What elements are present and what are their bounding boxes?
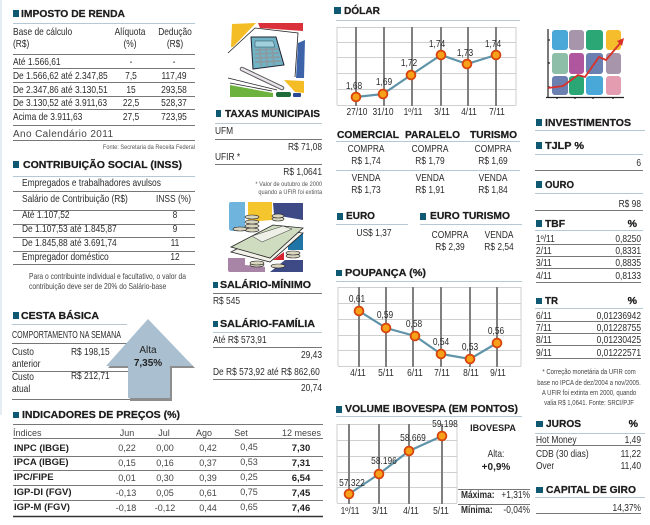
panel: câmbio comercial, paralelo, turismo: TURISMO [470, 129, 517, 141]
panel: salário-mínimo [213, 278, 322, 306]
panel: contribuição social: De 1.845,88 até 3.691,74 [22, 237, 117, 248]
panel: tr: % [628, 295, 638, 307]
panel: tr: 9/11 [536, 347, 552, 358]
panel: imposto de renda: 723,95 [161, 111, 187, 122]
line chart: ibovespa: 58.196 [371, 455, 397, 466]
panel: euro turismo: COMPRA [432, 229, 469, 240]
line chart: dólar: 1,68 [346, 80, 362, 91]
panel: câmbio comercial, paralelo, turismo: COMPRA [348, 143, 385, 154]
panel: imposto de renda: De 2.347,86 até 3.130,51 [13, 84, 108, 95]
panel: imposto de renda: 528,37 [161, 97, 187, 108]
panel: cesta básica: R$ 212,71 [71, 370, 110, 381]
panel: tbf [535, 218, 643, 282]
panel: câmbio comercial, paralelo, turismo: R$ 1,74 [351, 155, 381, 166]
panel: euro [336, 210, 408, 238]
panel: indicadores de preços: IGP-DI (FGV) [14, 487, 72, 498]
callout: ibovespa: -0,04% [503, 504, 530, 515]
heading: cesta básica: CESTA BÁSICA [21, 309, 99, 322]
panel: taxas municipais: R$ 71,08 [288, 141, 322, 152]
line chart: ibovespa: 5/11 [433, 505, 449, 516]
line chart: poupança: 7/11 [434, 367, 450, 378]
panel: contribuição social: Salário de Contribuição (R$) [22, 193, 128, 204]
panel: câmbio comercial, paralelo, turismo: COMPRA [412, 143, 449, 154]
heading: juros: JUROS [546, 418, 581, 430]
panel: contribuição social: Até 1.107,52 [22, 209, 70, 220]
callout: ibovespa: Mínima: [461, 504, 493, 515]
panel: câmbio comercial, paralelo, turismo [336, 129, 520, 195]
line chart: poupança: 4/11 [350, 367, 366, 378]
panel: contribuição social: contribuição deve ser de 20% do Salário-base [29, 281, 166, 291]
line chart: dólar: 1,72 [401, 57, 417, 68]
panel: salário-família: De R$ 573,92 até R$ 862,60 [213, 366, 320, 377]
panel: contribuição social: Empregador doméstico [22, 251, 109, 262]
line chart: poupança: 6/11 [407, 367, 423, 378]
icon: money illustration [228, 202, 303, 272]
panel: indicadores de preços: Jun [120, 428, 134, 438]
panel: volume ibovespa [336, 403, 530, 516]
panel: salário-família: Até R$ 573,91 [213, 334, 267, 345]
panel: imposto de renda: 117,49 [161, 70, 187, 81]
heading: poupança: POUPANÇA (%) [345, 267, 426, 279]
panel: indicadores de preços: 0,45 [240, 442, 258, 452]
panel: contribuição social: 12 [170, 251, 180, 262]
panel: capital de giro: 14,37% [613, 502, 641, 513]
panel: imposto de renda: Fonte: Secretaria da Receita Federal [103, 144, 195, 151]
panel: indicadores de preços: 0,75 [240, 487, 258, 497]
panel: tbf: 0,8835 [615, 257, 641, 268]
panel: indicadores de preços: 0,53 [240, 457, 258, 467]
panel: indicadores de preços: 0,42 [199, 443, 217, 453]
note: ufir: * Correção monetária da UFIR com [542, 369, 636, 376]
panel: indicadores de preços: -0,12 [155, 503, 175, 513]
heading: salário-família: SALÁRIO-FAMÍLIA [220, 317, 315, 330]
panel: indicadores de preços: 0,25 [240, 472, 258, 482]
panel: tbf: 1º/11 [536, 233, 555, 244]
panel: tbf: 3/11 [536, 257, 552, 268]
panel: indicadores de preços [13, 409, 323, 516]
panel: indicadores de preços: 0,05 [156, 488, 174, 498]
panel: juros: Hot Money [536, 434, 577, 445]
panel: tbf: % [628, 218, 638, 230]
panel: juros: CDB (30 dias) [536, 448, 589, 459]
note: ufir: base no IPCA de dez/2004 a nov/2005. [537, 380, 641, 387]
panel: tr: 0,01230425 [597, 334, 641, 345]
panel: taxas municipais: * Valor de outubro de 2000 [255, 181, 323, 188]
line chart: dólar: 1,73 [457, 47, 473, 58]
panel: tbf: 0,8331 [615, 245, 641, 256]
line chart: poupança: 5/11 [378, 367, 394, 378]
panel: juros [535, 418, 645, 471]
icon: calculator illustration [228, 23, 305, 97]
panel: tr: 8/11 [536, 334, 552, 345]
panel: indicadores de preços: 0,22 [118, 443, 136, 453]
line chart: poupança: 0,56 [488, 325, 504, 336]
line chart: poupança: 8/11 [463, 367, 479, 378]
line chart: dólar: 27/10 [347, 106, 367, 117]
panel: imposto de renda: (%) [123, 38, 137, 49]
callout: ibovespa: Alta: [488, 448, 504, 459]
panel: imposto de renda: (R$) [13, 38, 29, 49]
panel: indicadores de preços: -0,13 [116, 488, 136, 498]
heading: investimentos: INVESTIMENTOS [545, 117, 631, 129]
arrow: alta: 7,35% [134, 358, 162, 369]
panel: salário-mínimo: R$ 545 [213, 295, 240, 306]
heading: indicadores de preços: INDICADORES DE PREÇOS (%) [22, 409, 180, 421]
heading: salário-mínimo: SALÁRIO-MÍNIMO [220, 278, 311, 291]
line chart: dólar: 1,69 [376, 76, 392, 87]
line chart: poupança: 0,58 [406, 318, 422, 329]
panel: câmbio comercial, paralelo, turismo: VENDA [416, 172, 445, 183]
panel: imposto de renda: Ano Calendário 2011 [13, 129, 113, 140]
panel: indicadores de preços: INPC (IBGE) [14, 443, 69, 454]
line chart: dólar: 4/11 [461, 106, 477, 117]
line chart: ibovespa: 59.198 [432, 418, 458, 429]
panel: taxas municipais [215, 108, 323, 196]
callout: ibovespa: IBOVESPA [470, 423, 516, 433]
panel: câmbio comercial, paralelo, turismo: VENDA [479, 172, 508, 183]
panel: euro turismo: VENDA [485, 229, 514, 240]
panel: tbf: 4/11 [536, 270, 552, 281]
panel: euro turismo [420, 210, 522, 252]
panel: indicadores de preços: 7,30 [292, 443, 310, 454]
panel: câmbio comercial, paralelo, turismo: R$ 1,79 [415, 155, 445, 166]
panel: tr: 0,01222571 [597, 347, 641, 358]
panel: euro: US$ 1,37 [357, 227, 391, 238]
panel: contribuição social: 8 [173, 209, 177, 220]
panel: indicadores de preços: 0,37 [199, 458, 217, 468]
panel: contribuição social: 9 [173, 223, 177, 234]
panel: tjlp: 6 [636, 157, 641, 168]
panel: poupança [336, 267, 522, 378]
panel: imposto de renda: 293,58 [161, 84, 187, 95]
icon: growth chart illustration [546, 29, 624, 99]
panel: indicadores de preços: IGP-M (FGV) [14, 502, 70, 513]
panel: juros: Over [536, 460, 554, 471]
panel: tr: 0,01228755 [597, 322, 641, 333]
panel: indicadores de preços: IPC/FIPE [14, 472, 54, 483]
heading: tr: TR [545, 295, 558, 307]
panel: euro turismo: R$ 2,54 [484, 241, 514, 252]
panel: imposto de renda: Acima de 3.911,63 [13, 111, 82, 122]
line chart: poupança: 9/11 [490, 367, 506, 378]
panel: indicadores de preços: IPCA (IBGE) [14, 457, 69, 468]
panel: taxas municipais: R$ 1,0641 [283, 166, 322, 177]
heading: contribuição social: CONTRIBUIÇÃO SOCIAL (INSS) [23, 158, 182, 171]
line chart: ibovespa: 4/11 [403, 505, 419, 516]
panel: indicadores de preços: Ago [196, 428, 212, 438]
callout: ibovespa [458, 423, 530, 515]
panel: tbf: 0,8250 [615, 233, 641, 244]
panel: câmbio comercial, paralelo, turismo: VENDA [352, 172, 381, 183]
note: ufir: A UFIR foi extinta em 2000, quando [542, 390, 637, 397]
heading: imposto de renda: IMPOSTO DE RENDA [21, 8, 125, 20]
panel: indicadores de preços: 12 meses [282, 428, 321, 438]
panel: indicadores de preços: 0,65 [240, 502, 258, 512]
panel: indicadores de preços: Índices [13, 428, 42, 438]
line chart: poupança: 0,61 [349, 293, 365, 304]
panel: indicadores de preços: 0,44 [199, 503, 217, 513]
panel: taxas municipais: quando a UFIR foi extinta [258, 189, 323, 196]
panel: imposto de renda: Até 1.566,61 [13, 56, 61, 67]
panel: imposto de renda: - [130, 56, 132, 67]
heading: tbf: TBF [545, 218, 566, 230]
line chart: ibovespa: 3/11 [372, 505, 388, 516]
line chart: poupança: 0,54 [433, 336, 449, 347]
panel: câmbio comercial, paralelo, turismo: COMPRA [475, 143, 512, 154]
panel: imposto de renda: 27,5 [123, 111, 139, 122]
panel: capital de giro [535, 484, 645, 514]
panel: cesta básica: atual [12, 383, 30, 394]
panel: dólar [334, 4, 520, 117]
panel: tbf: 0,8133 [615, 270, 641, 281]
arrow: alta: Alta [139, 345, 157, 356]
panel: câmbio comercial, paralelo, turismo: R$ 1,69 [478, 155, 508, 166]
panel: juros: 11,22 [621, 448, 641, 459]
panel: cesta básica [12, 309, 195, 401]
callout: ibovespa: +0,9% [482, 462, 510, 473]
panel: contribuição social: De 1.107,53 até 1.845,87 [22, 223, 117, 234]
panel: câmbio comercial, paralelo, turismo: R$ 1,73 [351, 184, 381, 195]
panel: taxas municipais: UFM [215, 125, 233, 136]
panel: indicadores de preços: -0,18 [116, 503, 136, 513]
panel: cesta básica: COMPORTAMENTO NA SEMANA [12, 330, 121, 341]
panel: tr: 7/11 [536, 322, 552, 333]
panel: taxas municipais: UFIR * [215, 151, 241, 162]
panel: imposto de renda [13, 8, 195, 151]
line chart: ibovespa: 58.669 [400, 432, 426, 443]
heading: euro turismo: EURO TURISMO [430, 210, 510, 222]
heading: capital de giro: CAPITAL DE GIRO [546, 484, 636, 496]
panel: imposto de renda: Base de cálculo [13, 26, 72, 37]
note: ufir: valia R$ 1,0641. Fonte: SRCI/PJF [544, 400, 634, 407]
panel: contribuição social: INSS (%) [156, 193, 191, 204]
panel: indicadores de preços: 7,31 [292, 458, 311, 469]
panel: cesta básica: R$ 198,15 [71, 346, 110, 357]
line chart: ibovespa: 57.322 [339, 477, 365, 488]
panel: tr [535, 295, 643, 358]
panel: câmbio comercial, paralelo, turismo: COMERCIAL [337, 129, 400, 141]
heading: taxas municipais: TAXAS MUNICIPAIS [225, 108, 320, 120]
arrow: alta [106, 319, 195, 401]
heading: euro: EURO [346, 210, 375, 222]
panel: imposto de renda: 22,5 [123, 97, 139, 108]
line chart: dólar: 3/11 [434, 106, 450, 117]
panel: contribuição social: Para o contribuinte individual e facultativo, o valor da [29, 271, 187, 281]
panel: cesta básica: anterior [12, 358, 40, 369]
panel: cesta básica: Custo [12, 371, 34, 382]
panel: indicadores de preços: 0,00 [156, 443, 174, 453]
panel: salário-família: 29,43 [301, 349, 322, 360]
panel: salário-família: 20,74 [301, 382, 322, 393]
panel: indicadores de preços: 0,30 [156, 473, 174, 483]
heading: dólar: DÓLAR [344, 4, 380, 17]
heading: volume ibovespa: VOLUME IBOVESPA (EM PONTOS) [345, 403, 518, 415]
panel: imposto de renda: 15 [126, 84, 136, 95]
panel: contribuição social [13, 158, 195, 291]
line chart: poupança: 0,53 [462, 341, 478, 352]
panel: juros: 1,49 [625, 434, 641, 445]
panel: imposto de renda: Dedução [158, 26, 192, 37]
line chart: poupança [338, 287, 521, 378]
panel: salário-família [213, 317, 322, 393]
panel: contribuição social: Empregados e trabalhadores avulsos [22, 177, 161, 188]
panel: imposto de renda: - [173, 56, 175, 67]
panel: imposto de renda: De 1.566,62 até 2.347,85 [13, 70, 108, 81]
line chart: dólar [337, 27, 516, 117]
callout: ibovespa: Máxima: [461, 489, 495, 500]
note: ufir [537, 369, 641, 407]
panel: indicadores de preços: 7,45 [292, 488, 311, 499]
panel: câmbio comercial, paralelo, turismo: PARALELO [405, 129, 460, 141]
line chart: poupança: 0,59 [377, 309, 393, 320]
line chart: dólar: 1º/11 [404, 106, 422, 117]
panel: cesta básica: Custo [12, 346, 34, 357]
panel: indicadores de preços: Set [234, 428, 248, 438]
panel: indicadores de preços: 6,54 [292, 473, 311, 484]
panel: juros: % [629, 418, 639, 430]
panel: imposto de renda: De 3.130,52 até 3.911,63 [13, 97, 107, 108]
heading: ouro: OURO [545, 179, 574, 191]
panel: indicadores de preços: 0,01 [118, 473, 136, 483]
line chart: dólar: 1,74 [429, 38, 445, 49]
panel: câmbio comercial, paralelo, turismo: R$ 1,91 [415, 184, 445, 195]
panel: tr: 6/11 [536, 310, 552, 321]
panel: euro turismo: R$ 2,39 [435, 241, 465, 252]
panel: indicadores de preços: Jul [158, 428, 170, 438]
panel: juros: 11,40 [621, 460, 641, 471]
panel: imposto de renda: 7,5 [125, 70, 137, 81]
panel: câmbio comercial, paralelo, turismo: R$ 1,84 [478, 184, 508, 195]
panel: indicadores de preços: 0,16 [156, 458, 174, 468]
panel: indicadores de preços: 7,46 [292, 503, 310, 514]
panel: investimentos [535, 117, 645, 130]
panel: tbf: 2/11 [536, 245, 552, 256]
panel: ouro [535, 179, 643, 210]
heading: tjlp: TJLP % [545, 140, 585, 152]
line chart: dólar: 7/11 [489, 106, 505, 117]
panel: contribuição social: 11 [171, 237, 179, 248]
panel: tr: 0,01236942 [597, 310, 641, 321]
panel: imposto de renda: Alíquota [115, 26, 146, 37]
panel: indicadores de preços: 0,39 [199, 473, 217, 483]
panel: indicadores de preços: 0,15 [118, 458, 136, 468]
line chart: ibovespa [337, 418, 458, 516]
line chart: dólar: 1,74 [485, 38, 501, 49]
line chart: ibovespa: 1º/11 [341, 505, 359, 516]
line chart: dólar: 31/10 [373, 106, 393, 117]
panel: tjlp [535, 140, 643, 170]
callout: ibovespa: +1,31% [501, 489, 530, 500]
panel: indicadores de preços: 0,61 [199, 488, 217, 498]
panel: ouro: R$ 98 [619, 198, 641, 209]
panel: imposto de renda: (R$) [167, 38, 183, 49]
